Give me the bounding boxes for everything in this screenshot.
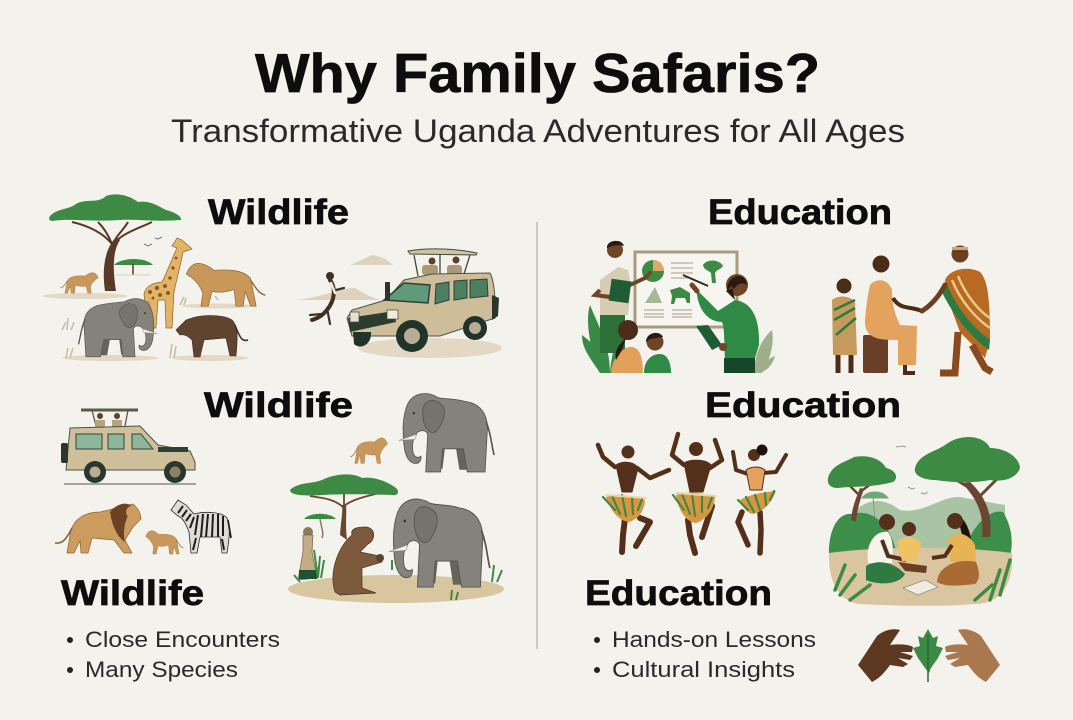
wildlife bullet list: Close Encounters (85, 627, 280, 652)
passengers (422, 256, 462, 275)
lioness (186, 263, 265, 306)
monkey (333, 527, 384, 595)
elephant (389, 499, 490, 587)
acacia tree (49, 194, 181, 291)
illustration: dancers (598, 434, 786, 553)
heading: wildlife 1: Wildlife (208, 193, 349, 232)
giraffe (144, 238, 192, 328)
lion (55, 504, 141, 553)
elder (922, 246, 992, 373)
child (832, 278, 857, 373)
dancer three (733, 444, 786, 553)
illustration: family studying outdoors (828, 437, 1020, 606)
board (635, 252, 737, 327)
illustration: savanna animals (43, 194, 265, 361)
heading: wildlife 2: Wildlife (204, 386, 353, 425)
wildlife bullet list: Many Species (85, 657, 238, 682)
meerkat (298, 527, 317, 580)
leaping monkey (310, 272, 344, 324)
illustration: cub and elephant (351, 394, 494, 472)
adult right (932, 513, 979, 586)
small tree (304, 514, 336, 519)
illustration: family greeting a cultural elder (832, 246, 992, 373)
icon: hands holding a leaf (858, 629, 1000, 682)
grass (62, 296, 218, 358)
tree left (828, 456, 896, 522)
seated children (611, 320, 671, 373)
hills (840, 497, 1005, 560)
child (897, 522, 927, 573)
ground patches (43, 293, 254, 361)
dancer two (672, 434, 722, 553)
right teacher (683, 274, 759, 373)
lion cub (60, 273, 98, 293)
illustration: tree, monkey, meerkat and elephant (288, 474, 504, 603)
grass (294, 550, 502, 600)
tree right (915, 437, 1020, 537)
illustration: side-view safari vehicle (61, 410, 196, 484)
left teacher (595, 241, 650, 353)
rack (408, 249, 477, 276)
elephant (78, 299, 157, 357)
education bullet list: Hands-on Lessons (612, 627, 816, 652)
open book (903, 580, 938, 595)
zebra (171, 500, 231, 553)
title: Why Family Safaris? (255, 42, 820, 104)
acacia (290, 474, 398, 540)
seat (863, 335, 888, 373)
wildlife bullet list (67, 627, 280, 682)
illustration: teachers with a board (582, 241, 775, 373)
ground (829, 548, 1012, 606)
leaves (582, 305, 625, 373)
hills (295, 255, 393, 300)
large elephant (399, 394, 494, 472)
cub (146, 531, 184, 554)
education bullet list (594, 627, 816, 682)
seated woman (865, 256, 922, 373)
illustration: lion, cub and zebra (55, 500, 231, 554)
dancer one (598, 445, 669, 552)
birds (144, 237, 162, 246)
brown hyena (176, 316, 248, 357)
plants (835, 560, 1010, 600)
illustration: safari vehicle and leaping monkey (295, 249, 502, 358)
jeep body (347, 273, 499, 352)
heading: education 3: Education (585, 574, 772, 613)
subtitle: Transformative Uganda Adventures for All Ages (171, 113, 905, 149)
small cub (351, 438, 388, 463)
small tree (114, 259, 153, 275)
distant tree (862, 492, 888, 520)
heading: wildlife 3: Wildlife (61, 574, 204, 613)
bushes (829, 512, 1012, 556)
birds (896, 446, 928, 494)
ground (288, 575, 504, 603)
heading: education 1: Education (708, 193, 892, 232)
adult left (866, 514, 906, 583)
shadow (358, 338, 502, 358)
heading: education 2: Education (705, 386, 901, 425)
education bullet list: Cultural Insights (612, 657, 795, 682)
